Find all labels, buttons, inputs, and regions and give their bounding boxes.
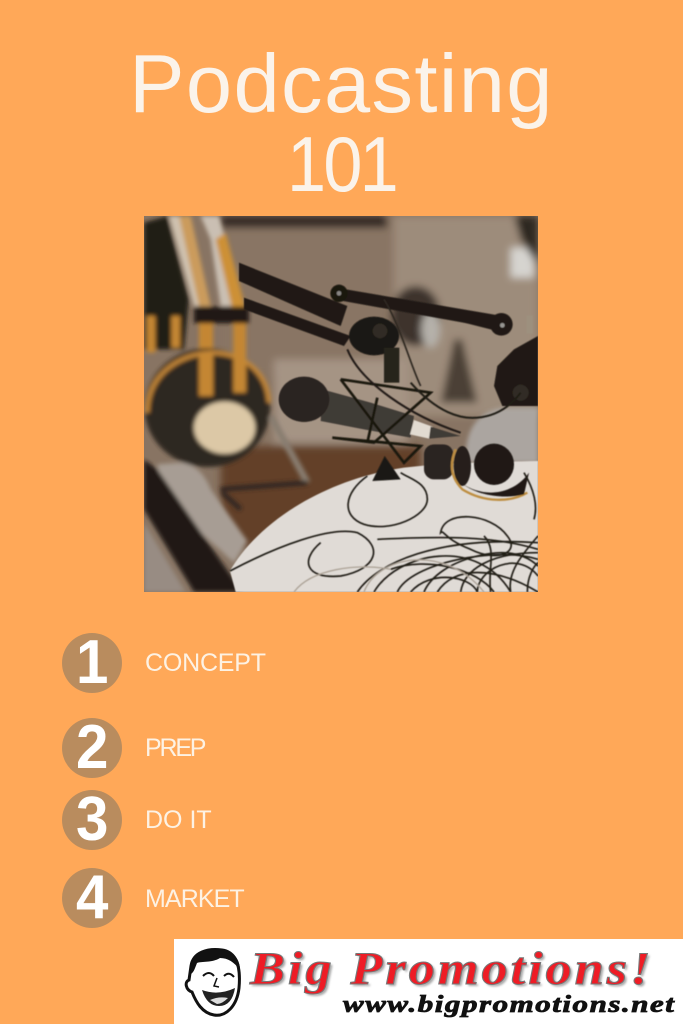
headphones bbox=[424, 444, 453, 479]
step 3: 3 bbox=[76, 785, 108, 854]
boom arms bbox=[239, 263, 347, 326]
step 2 bbox=[62, 713, 206, 782]
step 4: MARKET bbox=[145, 885, 244, 913]
title bbox=[129, 37, 554, 208]
step 3 bbox=[62, 785, 212, 854]
logo url: www.bigpromotions.net bbox=[343, 992, 675, 1018]
title: 101 bbox=[287, 120, 396, 208]
icon: laughing man face bbox=[184, 948, 241, 1017]
photo: podcast studio microphones bbox=[144, 216, 538, 592]
logo banner: Big Promotions bbox=[174, 939, 683, 1024]
step 1: 1 bbox=[76, 628, 108, 697]
stand bbox=[372, 456, 401, 481]
microphone bbox=[321, 389, 414, 438]
step 3: DO IT bbox=[145, 806, 212, 834]
step 1 bbox=[62, 628, 266, 697]
step 2: PREP bbox=[145, 734, 204, 762]
table bbox=[230, 461, 538, 592]
title: Podcasting bbox=[129, 37, 554, 130]
step 4 bbox=[62, 863, 244, 932]
logo name: Big Promotions! bbox=[250, 943, 653, 995]
step 2: 2 bbox=[76, 713, 108, 782]
shock mount bbox=[332, 379, 431, 463]
step 4: 4 bbox=[76, 863, 108, 932]
step 1: CONCEPT bbox=[145, 649, 266, 677]
cables bbox=[230, 473, 538, 592]
